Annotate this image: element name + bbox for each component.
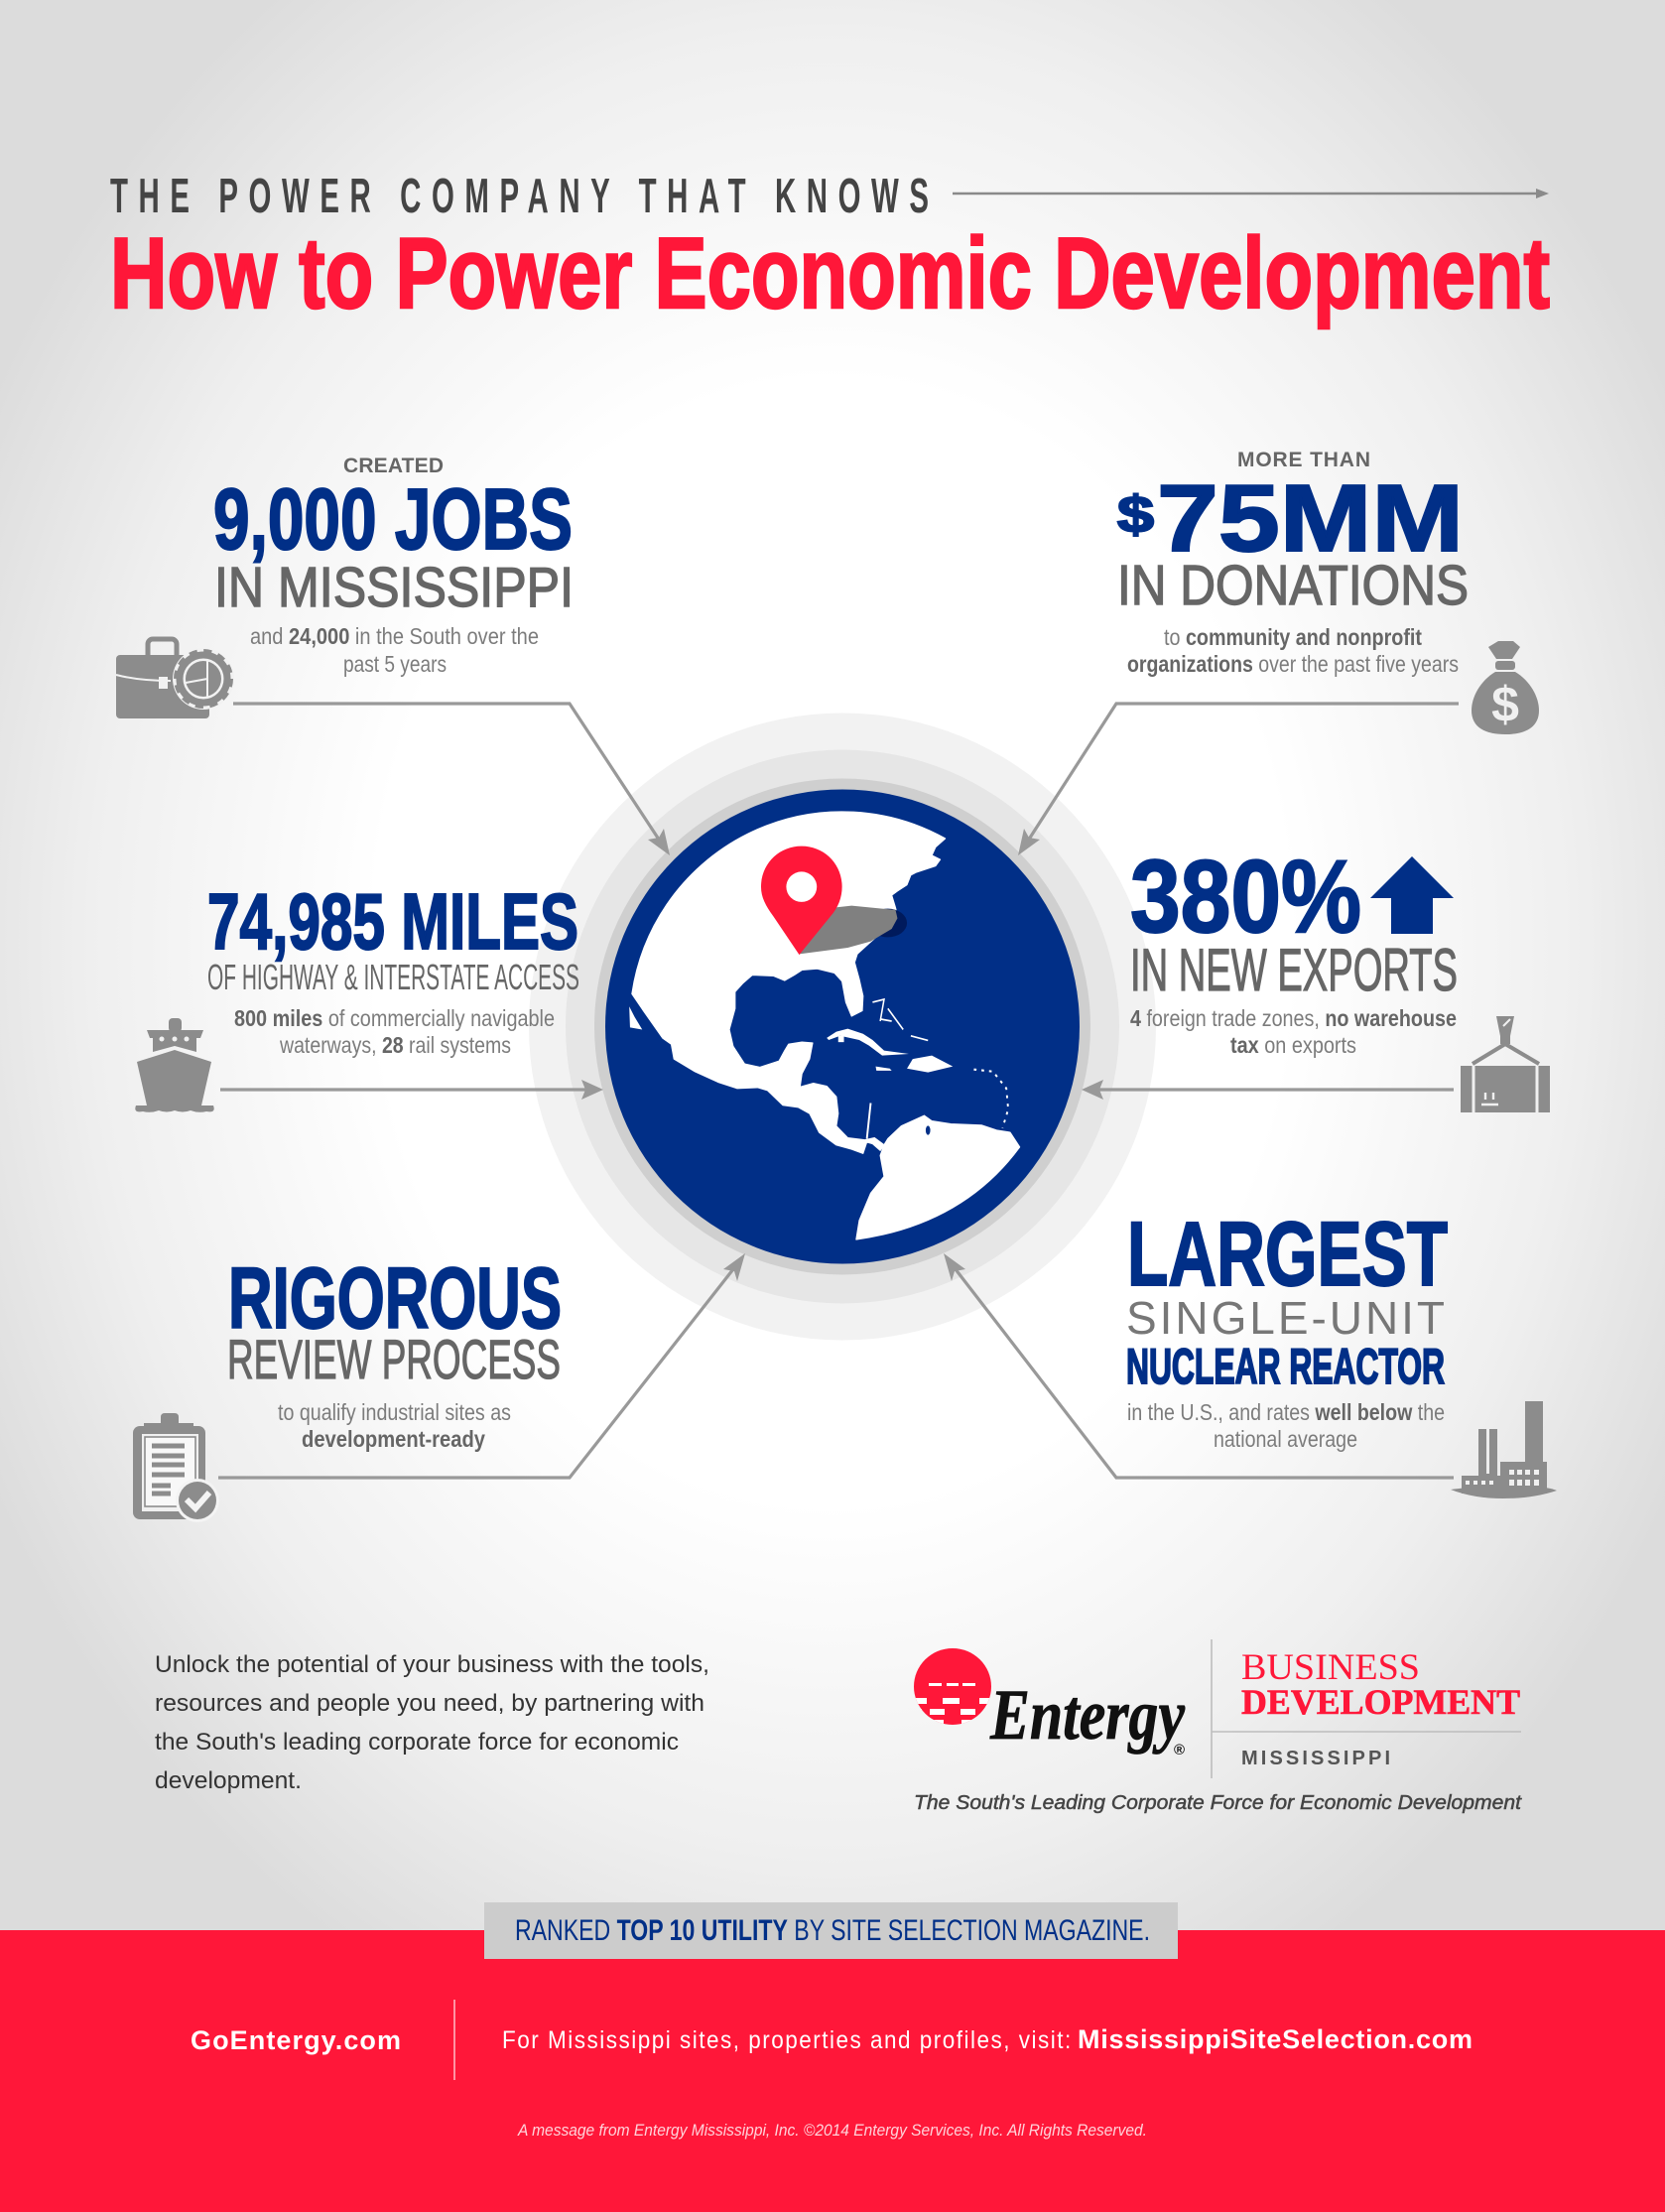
panel: jobs	[116, 455, 670, 855]
pin shadow over sea	[869, 909, 907, 937]
arrow: exports to globe	[1082, 1080, 1454, 1100]
icon: Entergy sun	[914, 1648, 992, 1725]
description: to community and nonprofit	[1164, 624, 1422, 650]
concentric rings	[529, 713, 1156, 1340]
icon: ship	[135, 1018, 214, 1112]
description	[250, 623, 539, 677]
description: 800 miles of commercially navigable	[234, 1005, 555, 1031]
divider	[1212, 1639, 1521, 1778]
footer divider	[453, 2000, 455, 2080]
headline stat: LARGEST	[1127, 1204, 1448, 1305]
arrow: review process to globe	[218, 1253, 745, 1478]
registered mark: ®	[1174, 1742, 1185, 1758]
website link: GoEntergy.com	[191, 2025, 401, 2055]
map of the Americas	[629, 812, 1020, 1239]
caption: CREATED	[343, 455, 444, 477]
description: to qualify industrial sites as	[278, 1399, 511, 1425]
globe circle	[605, 790, 1080, 1264]
eyebrow heading: THE POWER COMPANY THAT KNOWS	[110, 168, 929, 223]
icon: power plant	[1451, 1401, 1557, 1498]
globe graphic	[529, 713, 1156, 1340]
pin shadow over land	[799, 906, 897, 954]
subheading accent: NUCLEAR REACTOR	[1126, 1339, 1445, 1394]
business development lockup: MISSISSIPPI	[1241, 1748, 1390, 1769]
Entergy logo	[914, 1639, 1523, 1814]
footer band	[0, 1902, 1665, 2212]
location pin and shadow	[761, 846, 907, 955]
ranking badge: RANKED TOP 10 UTILITY BY SITE SELECTION MAGAZINE.	[515, 1914, 1150, 1947]
description: waterways, 28 rail systems	[279, 1032, 511, 1058]
site selection message: For Mississippi sites, properties and profiles, visit:	[502, 2026, 1071, 2054]
closing paragraph: Unlock the potential of your business with the tools,	[155, 1651, 709, 1678]
icon: briefcase with gear	[116, 639, 234, 718]
closing paragraph: the South's leading corporate force for economic	[155, 1729, 679, 1756]
pin	[761, 846, 842, 955]
red band	[0, 1930, 1665, 2212]
subheading: IN MISSISSIPPI	[214, 556, 574, 619]
subheading: IN DONATIONS	[1117, 554, 1469, 617]
icon: container on crane hook	[1461, 1016, 1550, 1112]
headline stat: 9,000 JOBS	[213, 471, 573, 568]
description	[1127, 624, 1459, 677]
arrow: highways to globe	[220, 1080, 603, 1100]
description: development-ready	[302, 1426, 485, 1452]
subheading: IN NEW EXPORTS	[1130, 937, 1458, 1003]
tagline: The South's Leading Corporate Force for Economic Development	[914, 1792, 1523, 1814]
business development lockup: DEVELOPMENT	[1241, 1682, 1520, 1722]
closing paragraph	[155, 1651, 709, 1794]
subheading: SINGLE-UNIT	[1126, 1292, 1445, 1344]
description	[1127, 1399, 1445, 1452]
description: national average	[1214, 1426, 1357, 1452]
icon: money bag	[1472, 641, 1539, 734]
title block	[110, 168, 1550, 329]
description	[1130, 1005, 1457, 1058]
description: and 24,000 in the South over the	[250, 623, 539, 649]
ranking badge	[484, 1902, 1178, 1959]
description: organizations over the past five years	[1127, 651, 1459, 677]
site selection message	[502, 2024, 1473, 2054]
headline stat: $	[1117, 486, 1154, 544]
closing paragraph: development.	[155, 1767, 302, 1794]
panel: exports	[1082, 840, 1550, 1112]
description	[278, 1399, 511, 1452]
description: tax on exports	[1230, 1032, 1356, 1058]
arrow: jobs to globe	[233, 704, 670, 855]
description: 4 foreign trade zones, no warehouse	[1130, 1005, 1457, 1031]
caption: MORE THAN	[1237, 449, 1370, 471]
panel: highways	[135, 877, 603, 1112]
description	[234, 1005, 555, 1058]
panel: nuclear reactor	[944, 1204, 1557, 1498]
icon: up arrow	[1370, 856, 1454, 934]
panel: review process	[133, 1250, 745, 1522]
headline stat: 380%	[1130, 840, 1361, 955]
closing paragraph: resources and people you need, by partnering with	[155, 1690, 704, 1717]
description: past 5 years	[343, 651, 447, 677]
description: in the U.S., and rates well below the	[1127, 1399, 1445, 1425]
headline stat: RIGOROUS	[228, 1250, 562, 1347]
subheading: REVIEW PROCESS	[227, 1328, 561, 1390]
business development lockup: BUSINESS	[1241, 1647, 1420, 1688]
subheading: OF HIGHWAY & INTERSTATE ACCESS	[207, 957, 579, 997]
arrow: nuclear reactor to globe	[944, 1253, 1454, 1478]
arrow: donations to globe	[1018, 704, 1459, 855]
headline stat: 75MM	[1157, 465, 1464, 572]
site selection message: MississippiSiteSelection.com	[1078, 2024, 1473, 2054]
business development lockup	[1241, 1647, 1520, 1769]
pin hole	[786, 871, 817, 902]
panel: donations	[1018, 449, 1539, 855]
arrow: title rule	[953, 189, 1549, 198]
copyright note: A message from Entergy Mississippi, Inc. ©2014 Entergy Services, Inc. All Rights Reserved.	[517, 2121, 1147, 2140]
icon: clipboard with check	[133, 1413, 219, 1522]
icon: money bag: $	[1491, 677, 1519, 732]
headline stat: 74,985 MILES	[207, 877, 578, 966]
wordmark: Entergy	[989, 1675, 1186, 1755]
